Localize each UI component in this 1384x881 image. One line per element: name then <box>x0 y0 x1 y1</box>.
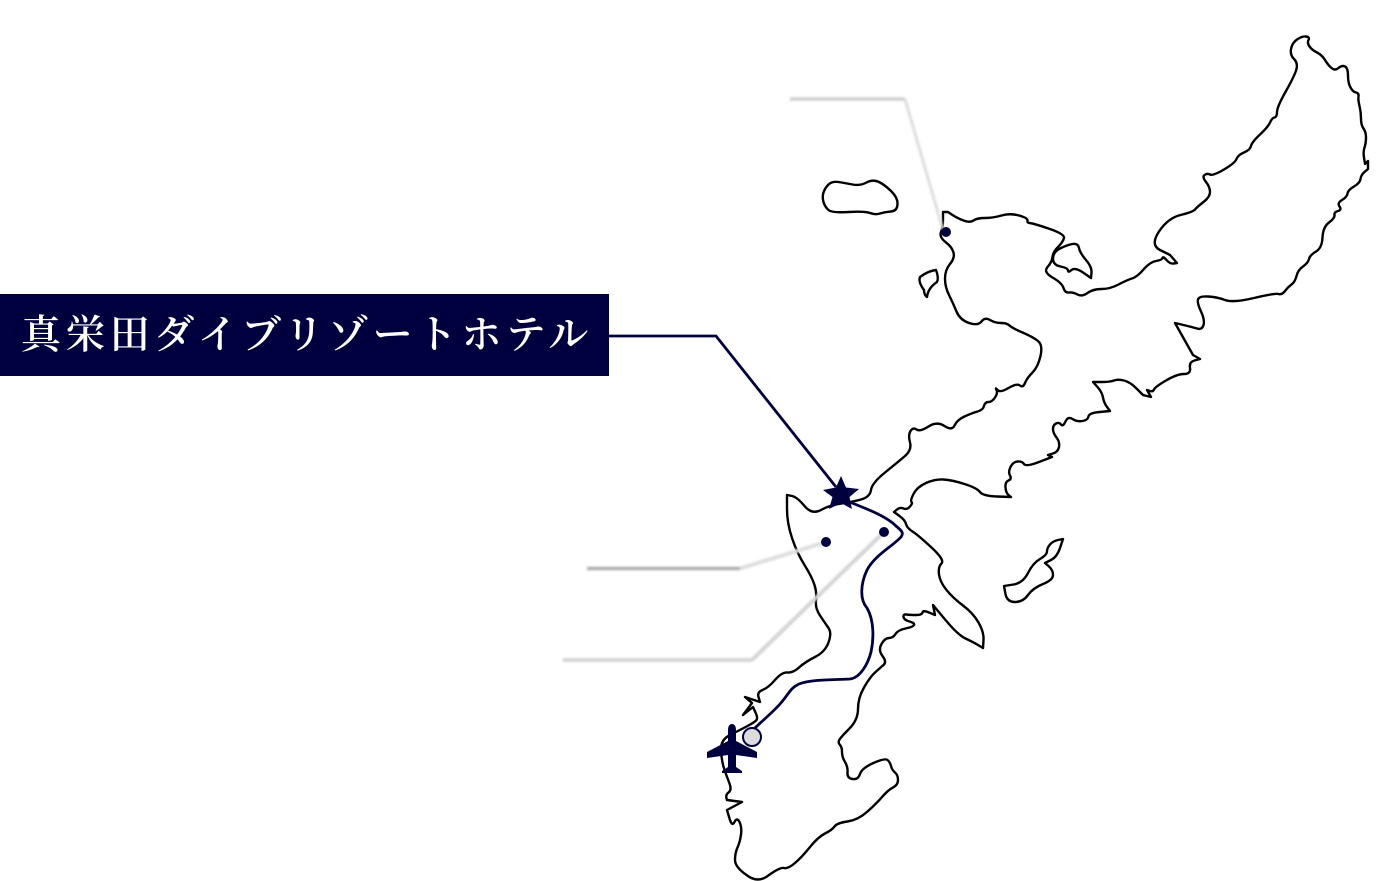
route line <box>755 503 902 728</box>
leader line: middle <box>587 542 826 568</box>
hotel name label <box>0 294 609 376</box>
location dot: lower <box>879 527 889 537</box>
island: Yagaji <box>1053 244 1092 278</box>
island: Ie <box>823 181 898 214</box>
leader line: hotel <box>609 336 836 487</box>
airport marker <box>743 728 761 746</box>
icon: airplane <box>707 724 757 773</box>
island: east coast <box>1004 539 1063 602</box>
island: Minna <box>920 270 938 297</box>
main island coastline <box>721 36 1368 880</box>
location dot: middle <box>821 537 831 547</box>
leader line: north <box>790 99 943 230</box>
hotel name label: 真栄田ダイブリゾートホテル <box>21 312 593 357</box>
icon: hotel star <box>823 476 859 509</box>
leader line: lower <box>563 532 884 660</box>
location dot: north <box>941 227 951 237</box>
